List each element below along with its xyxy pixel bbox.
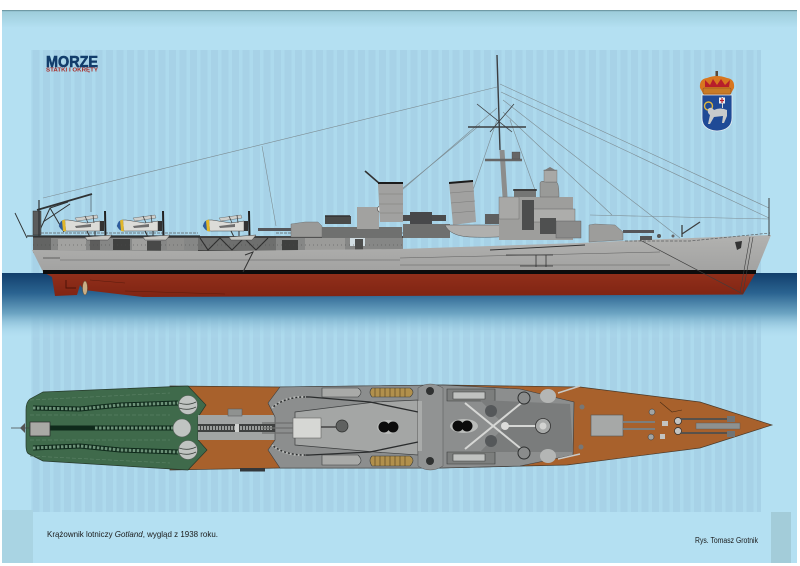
funnel 1: [378, 182, 403, 222]
caption: Krążownik lotniczy Gotland, wygląd z 1938 roku.: [47, 530, 218, 539]
midship band: [418, 384, 443, 470]
underwater hull: [43, 272, 756, 297]
midship turrets and house: [322, 171, 450, 238]
crown: [700, 71, 734, 95]
seaplanes: [59, 211, 256, 240]
aft turret plan: [262, 418, 348, 438]
foredeck fittings and rail: [625, 198, 770, 241]
foredeck fittings plan: [648, 402, 740, 440]
forward turret: [589, 224, 654, 242]
midship grey deck: [268, 385, 574, 468]
funnel 2: [449, 180, 476, 225]
green aft deck: [26, 386, 207, 470]
boats: [322, 388, 495, 466]
turntables: [173, 396, 198, 460]
shield: [702, 95, 732, 131]
aft turret: [258, 222, 322, 237]
ship side profile: [15, 55, 771, 297]
logo: Morze Statki i Okręty: MORZE: [46, 54, 98, 71]
illustrator credit: Rys. Tomasz Grotnik: [695, 536, 758, 545]
sea band: [2, 273, 797, 339]
mast: [468, 55, 526, 197]
grey hull: [32, 235, 771, 272]
logo: Morze Statki i Okręty: STATKI I OKRĘTY: [46, 68, 99, 74]
anchor: [735, 241, 742, 250]
lifeboat: [445, 225, 517, 237]
crane: [15, 194, 200, 238]
aircraft rails: [30, 393, 178, 463]
boot topping: [43, 270, 756, 274]
rigging stays: [43, 84, 769, 238]
ship plan view: [11, 384, 772, 472]
bridge plan: [465, 389, 573, 463]
central catapult track: [198, 409, 275, 472]
crane plan: [11, 422, 50, 436]
hull markings: [43, 237, 753, 294]
forward turret plan: [558, 386, 655, 459]
curved deck edges: [272, 397, 418, 455]
funnel tops: [377, 419, 478, 434]
rudder and propeller: [66, 280, 225, 295]
ram: [704, 97, 727, 124]
brown deck: [170, 385, 772, 470]
raised deckhouse: [295, 400, 418, 455]
superstructure band aft: [33, 233, 403, 253]
bridge: [485, 167, 581, 240]
coat of arms: [700, 71, 734, 131]
